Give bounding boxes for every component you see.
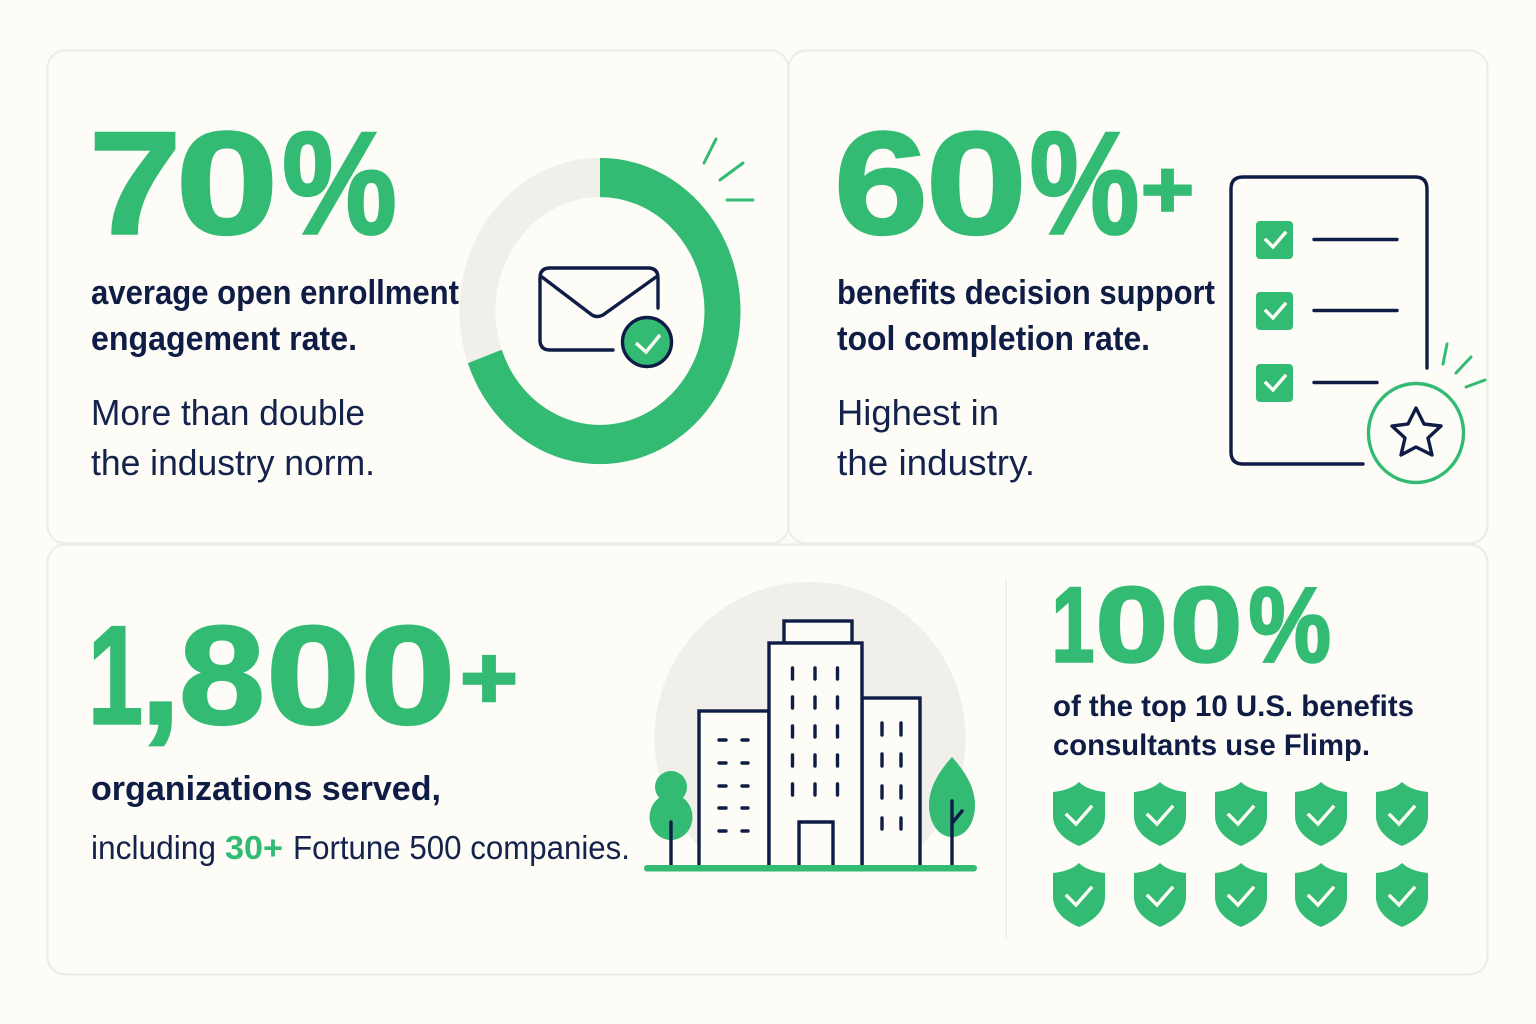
- panel: organizations and consultants: [48, 544, 1488, 974]
- stat: 1,800+: 8: [179, 596, 265, 754]
- stat: 1,800+: 0: [266, 596, 360, 754]
- stat: 60%+: +: [1141, 145, 1194, 234]
- stat: 60%+: [834, 102, 1194, 264]
- stat: 1,800+: 0: [360, 596, 456, 754]
- stat: 70%: 7: [89, 102, 181, 264]
- heading: completion rate: tool completion rate.: [837, 320, 1150, 358]
- stat: 1,800+: +: [460, 628, 518, 727]
- text: Fortune 500 companies: including: [91, 829, 216, 866]
- text: Fortune 500 companies: 30+: [225, 829, 283, 866]
- stat: 100%: 0: [1170, 564, 1242, 684]
- heading: organizations served: organizations served,: [91, 770, 441, 808]
- stat: 100%: %: [1248, 564, 1331, 684]
- panel: decision support completion: [788, 50, 1488, 544]
- heading: top 10 consultants: [1053, 690, 1414, 762]
- stat: 100%: 0: [1096, 564, 1168, 684]
- stat: 1,800+: 1: [88, 596, 143, 754]
- text: more than double: More than double: [91, 392, 365, 433]
- donut chart: 70 percent: [478, 177, 722, 445]
- icon: sparkle rays: [704, 139, 753, 200]
- stat: 60%+: %: [1030, 102, 1140, 264]
- stat: 1,800+: ,: [141, 596, 180, 754]
- icon: star badge: [1368, 344, 1485, 482]
- text: highest in the industry: Highest in: [837, 392, 999, 433]
- stat: 60%+: 0: [926, 102, 1027, 264]
- text: more than double: [91, 392, 375, 483]
- heading: top 10 consultants: consultants use Flimp.: [1053, 729, 1370, 762]
- icon: office buildings with trees: [644, 582, 977, 893]
- text: highest in the industry: the industry.: [837, 442, 1035, 483]
- icon grid: ten check shields: [1053, 782, 1428, 927]
- stat: 60%+: 6: [834, 102, 928, 264]
- text: more than double: the industry norm.: [91, 442, 375, 483]
- stat: 70%: %: [282, 102, 397, 264]
- heading: engagement rate: engagement rate.: [91, 320, 357, 358]
- heading: top 10 consultants: of the top 10 U.S. benefits: [1053, 690, 1414, 723]
- stat: 1,800+: [88, 596, 518, 754]
- panel: open enrollment engagement: [48, 50, 788, 544]
- icon: envelope with check badge: [540, 268, 672, 366]
- heading: completion rate: [837, 274, 1215, 358]
- heading: engagement rate: [91, 274, 459, 358]
- heading: completion rate: benefits decision support: [837, 274, 1215, 312]
- text: highest in the industry: [837, 392, 1035, 483]
- heading: engagement rate: average open enrollment: [91, 274, 459, 312]
- text: Fortune 500 companies: Fortune 500 companies.: [293, 829, 630, 866]
- text: Fortune 500 companies: [91, 829, 630, 866]
- icon: checklist document: [1231, 177, 1427, 464]
- stat: 70%: 0: [176, 102, 278, 264]
- stat: 100%: 1: [1052, 564, 1094, 684]
